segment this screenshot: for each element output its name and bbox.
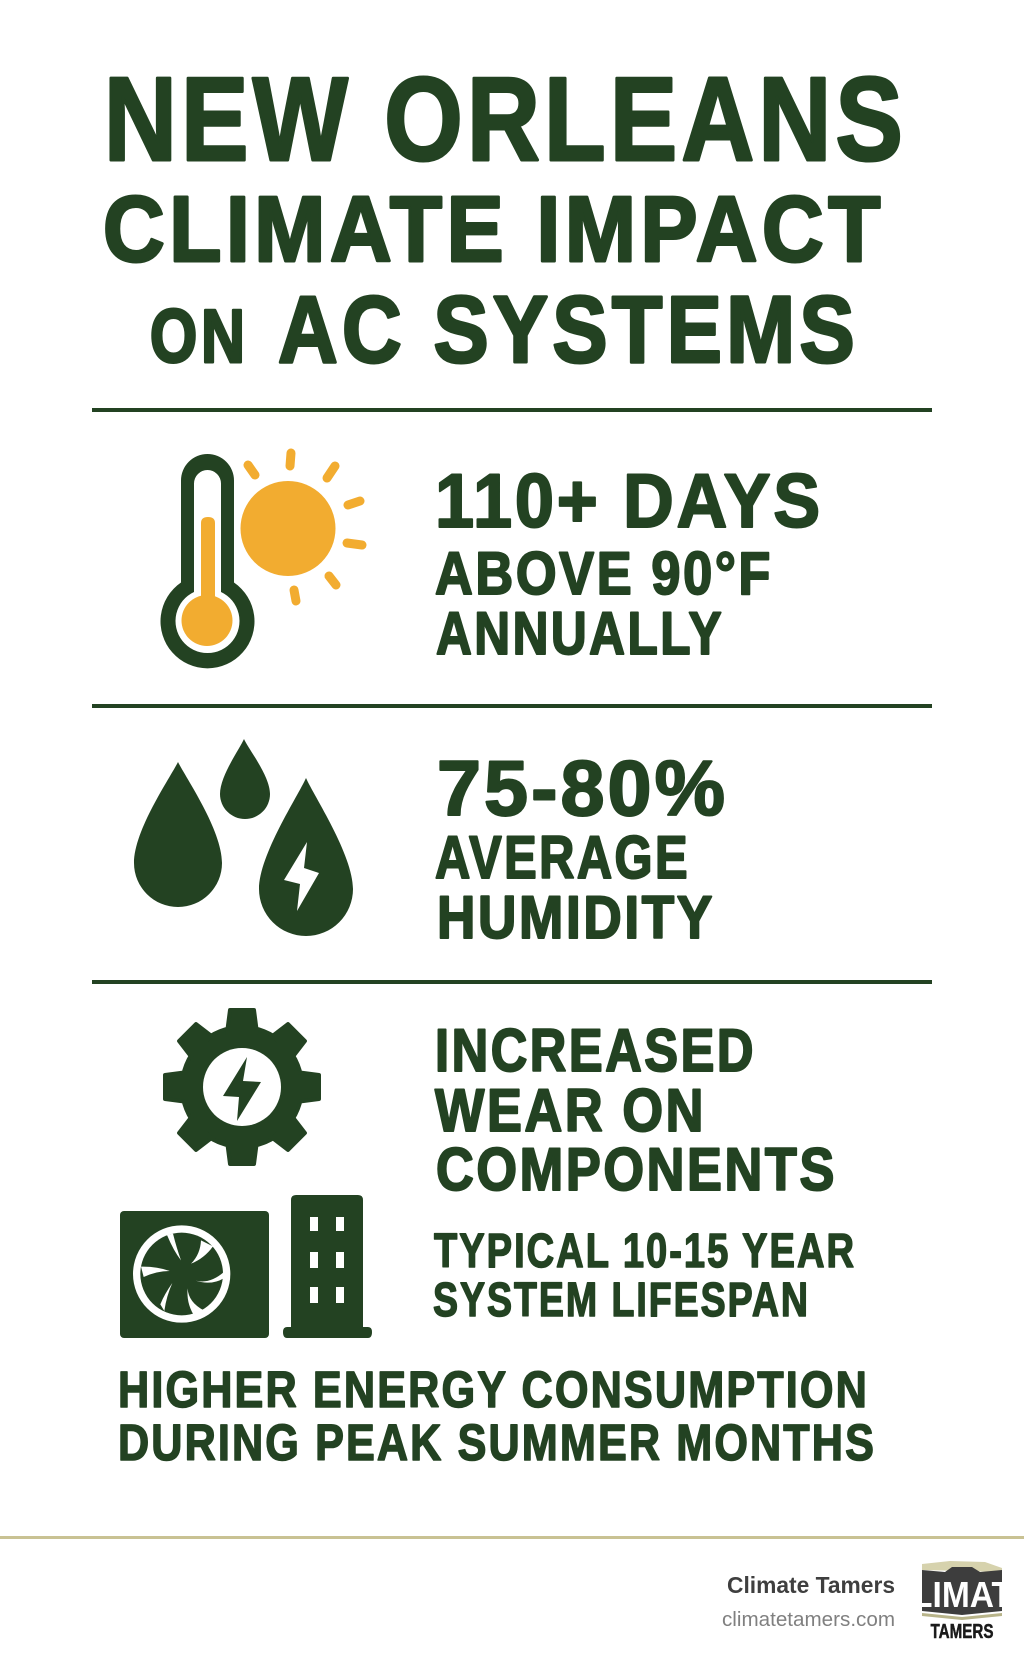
- stat: humidity: [435, 744, 728, 951]
- title: [103, 53, 907, 383]
- logo: TAMERS: [930, 1621, 994, 1643]
- logo: LIMAT: [912, 1574, 1012, 1615]
- stat: humidity: HUMIDITY: [437, 884, 715, 951]
- stat: increased wear: [435, 1017, 837, 1203]
- icon: building: [283, 1195, 372, 1338]
- stat: energy consumption: DURING PEAK SUMMER MONTHS: [118, 1414, 876, 1471]
- logo: [922, 1561, 1002, 1638]
- stat: 110+ days: ABOVE 90°F: [435, 540, 773, 607]
- stat: humidity: AVERAGE: [435, 824, 690, 891]
- stat: humidity: 75-80%: [437, 744, 728, 832]
- stat: system lifespan: TYPICAL 10-15 YEAR: [434, 1225, 856, 1278]
- icon: gear with bolt: [165, 1010, 319, 1164]
- icon: ac unit: [120, 1211, 269, 1338]
- stat: 110+ days: ANNUALLY: [436, 600, 724, 667]
- stat: energy consumption: HIGHER ENERGY CONSUMPTION: [118, 1361, 869, 1418]
- stat: 110+ days: 110+ DAYS: [435, 459, 823, 544]
- stat: system lifespan: [433, 1225, 856, 1327]
- title: AC SYSTEMS: [278, 277, 859, 383]
- stat: 110+ days: [435, 459, 823, 667]
- stat: energy consumption: [118, 1361, 876, 1471]
- title: CLIMATE IMPACT: [103, 177, 885, 281]
- footer divider: [0, 1536, 1024, 1539]
- footer url: climatetamers.com: [722, 1609, 895, 1631]
- title: NEW ORLEANS: [104, 53, 907, 186]
- stat: increased wear: INCREASED: [435, 1017, 756, 1084]
- footer brand name: Climate Tamers: [727, 1572, 895, 1598]
- icon: thermometer and sun: [160, 453, 362, 668]
- title: ON: [150, 294, 249, 378]
- stat: system lifespan: SYSTEM LIFESPAN: [433, 1274, 810, 1327]
- stat: increased wear: COMPONENTS: [436, 1136, 837, 1203]
- icon: water drops: [134, 739, 353, 936]
- stat: increased wear: WEAR ON: [435, 1077, 706, 1144]
